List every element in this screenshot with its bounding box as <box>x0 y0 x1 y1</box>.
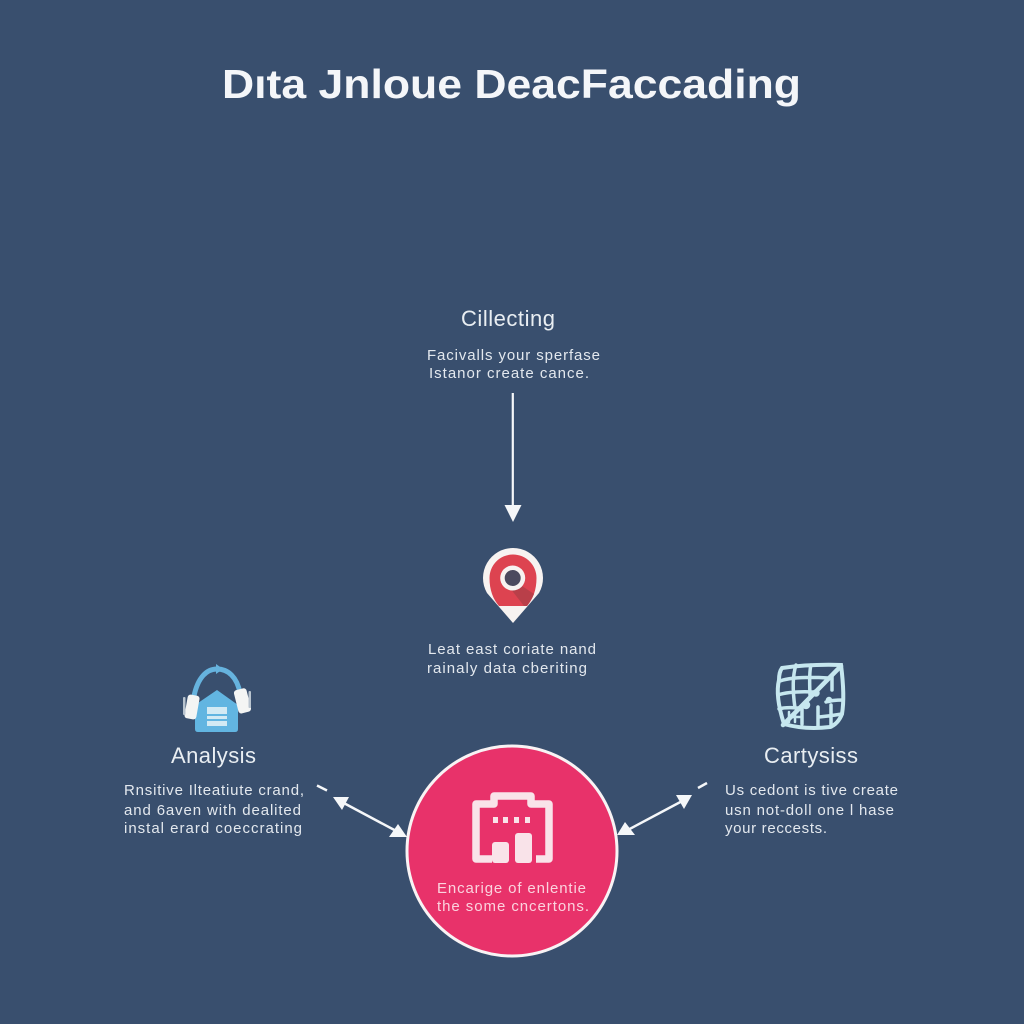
icon: map pin <box>483 548 543 623</box>
text block: centre description <box>437 880 589 915</box>
text block: analysis description: Rnsitive Ilteatiute crand, <box>124 782 304 799</box>
icon: building <box>476 796 549 863</box>
text block: analysis description: and 6aven with dealited <box>124 802 301 819</box>
arrow: analysis to centre <box>317 786 407 837</box>
icon: house with headphones <box>183 664 252 732</box>
text block: analysis description: instal erard coeccrating <box>124 820 302 837</box>
panel: location <box>427 548 596 677</box>
panel: cartysis <box>725 665 898 837</box>
heading: analysis: Analysis <box>171 743 256 768</box>
arrow: cartysis to centre <box>617 783 707 835</box>
heading: cartysis: Cartysiss <box>764 743 858 768</box>
panel: collecting <box>427 306 600 382</box>
text block: cartysis description: your reccests. <box>725 820 827 837</box>
text block: collecting description <box>427 347 600 382</box>
text block: location description: Leat east coriate nand <box>428 641 596 658</box>
panel: centre circle <box>407 746 617 956</box>
circle background <box>407 746 617 956</box>
text block: centre description: Encarige of enlentie <box>437 880 586 897</box>
text block: cartysis description: Us cedont is tive create <box>725 782 898 799</box>
text block: cartysis description: usn not-doll one l hase <box>725 802 894 819</box>
text block: collecting description: Istanor create cance. <box>429 365 589 382</box>
text block: collecting description: Facivalls your sperfase <box>427 347 600 364</box>
icon: globe grid <box>778 665 843 728</box>
text block: cartysis description <box>725 782 898 837</box>
text block: location description: rainaly data cberiting <box>427 660 587 677</box>
title: Dıta Jnloue DeacFaccading <box>222 61 801 107</box>
text block: analysis description <box>124 782 304 837</box>
arrow: collecting down to pin <box>504 393 522 522</box>
text block: location description <box>427 641 596 677</box>
heading: collecting: Cillecting <box>461 306 555 331</box>
panel: analysis <box>124 664 304 837</box>
text block: centre description: the some cncertons. <box>437 898 589 915</box>
